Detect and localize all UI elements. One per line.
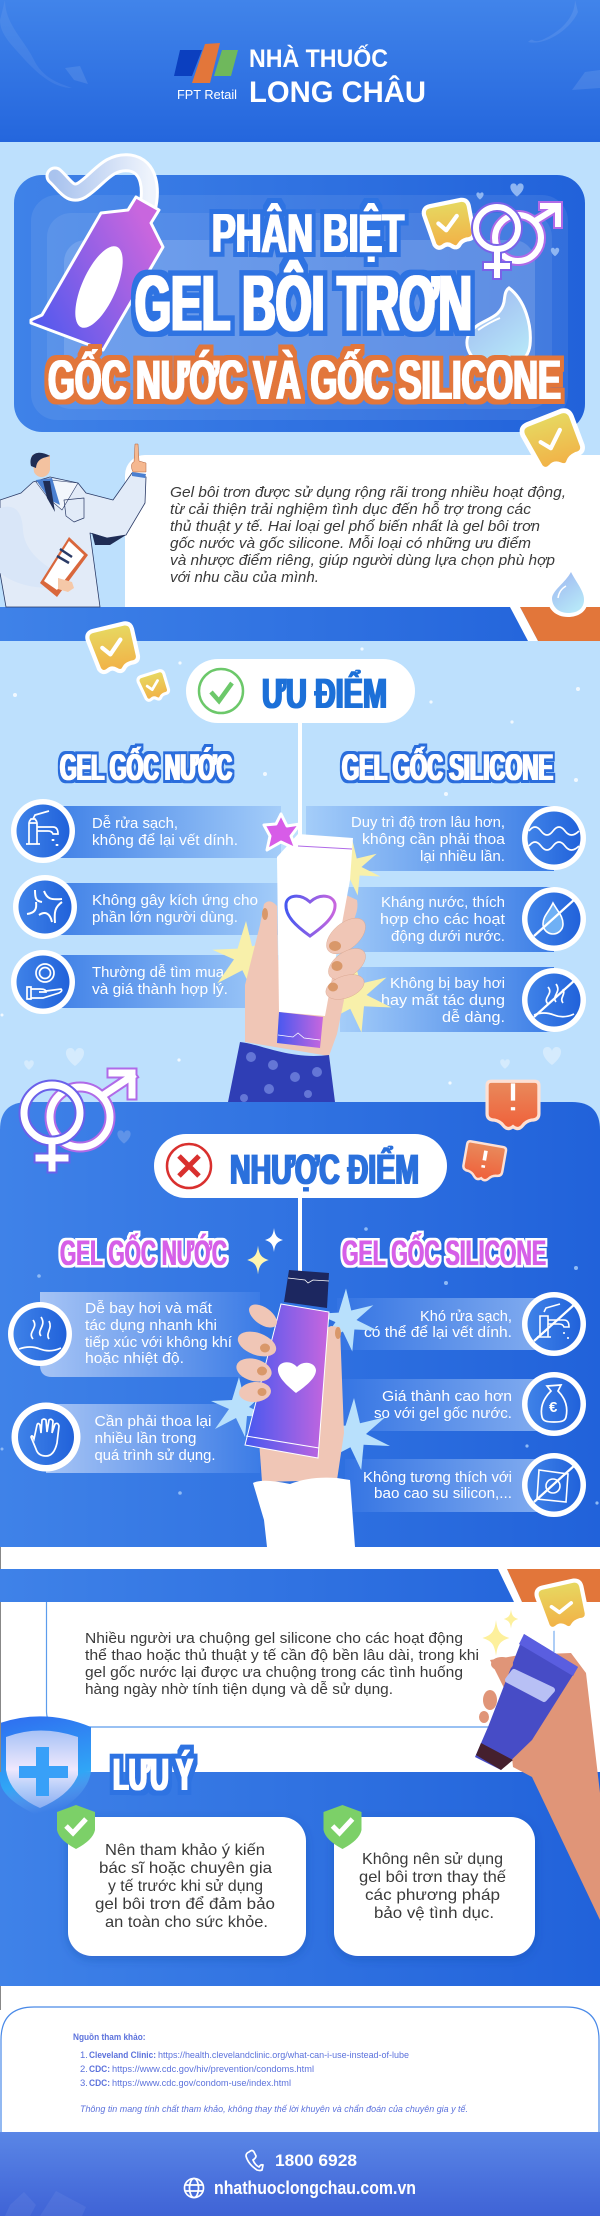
row: reapply <box>12 1402 260 1473</box>
panel: references: CDC: <box>89 2064 110 2075</box>
fingers <box>479 1657 513 1723</box>
text block: intro: với nhu cầu của mình. <box>170 569 319 586</box>
fingers <box>320 911 372 1004</box>
phone number: 1800 6928 <box>275 2151 357 2170</box>
icon: purple star <box>264 814 300 850</box>
row: expensive: Giá thành cao hơn <box>382 1388 512 1405</box>
row: incompatible <box>345 1453 586 1517</box>
row: easy to wash <box>11 799 281 863</box>
heart <box>278 1362 316 1393</box>
row: incompatible: bao cao su silicon,... <box>374 1485 512 1502</box>
panel: references: CDC: <box>89 2078 110 2089</box>
icon: irritation burst <box>27 890 62 923</box>
blue band above note <box>0 1569 600 1602</box>
text block: intro: thủ thuật y tế. Hai loại gel phổ biến nhất là gel bôi trơn <box>170 518 540 535</box>
row: affordable: Thường dễ tìm mua <box>92 964 225 981</box>
row: no evaporation: dễ dàng. <box>442 1009 505 1026</box>
fingernails <box>257 1327 341 1396</box>
heading: water-based: GEL GỐC NƯỚC <box>60 1233 227 1273</box>
icon: gender symbols <box>24 1073 132 1168</box>
text block: note: thể thao hoặc thủ thuật y tế cần độ bền lâu dài, trong khi <box>85 1647 479 1664</box>
row: long lasting: Duy trì độ trơn lâu hơn, <box>351 814 505 831</box>
row: water resistant: động dưới nước. <box>391 928 505 945</box>
card: consult a doctor: an toàn cho sức khỏe. <box>105 1914 268 1931</box>
sleeve <box>228 1042 335 1102</box>
decorative dots <box>0 647 580 1085</box>
row: evaporates: Dễ bay hơi và mất <box>85 1300 213 1317</box>
icon: money bag: € <box>549 1399 558 1416</box>
illustration: hand holding purple tube <box>211 1270 390 1547</box>
text block: intro: Gel bôi trơn được sử dụng rộng rãi trong nhiều hoạt động, <box>170 484 566 501</box>
icon: condom pack crossed <box>534 1465 575 1502</box>
reference 1: 1. <box>80 2050 88 2061</box>
starbursts <box>211 1288 390 1470</box>
panel: hero title <box>14 163 585 432</box>
row: long lasting <box>306 806 586 871</box>
fingernails <box>262 908 342 992</box>
brand name: NHÀ THUỐC <box>249 43 388 73</box>
hand <box>259 1326 344 1482</box>
footer <box>0 2132 600 2216</box>
band under intro <box>0 607 600 641</box>
icon: steam <box>19 1317 61 1351</box>
row: hard to wash: có thể để lại vết dính. <box>364 1324 512 1341</box>
row: evaporates <box>8 1292 260 1377</box>
card: not a replacement: bảo vệ tình dục. <box>374 1905 494 1922</box>
illustration: hand with blue tube <box>475 1580 600 1920</box>
row: incompatible: Không tương thích với <box>363 1469 512 1486</box>
brand name: LONG CHÂU <box>249 75 426 109</box>
brand name <box>249 43 426 109</box>
reference 3: 3. <box>80 2078 88 2089</box>
icon: green shield check <box>324 1805 362 1849</box>
white strip <box>0 1547 600 1569</box>
icon: steam crossed <box>534 980 575 1017</box>
row: water resistant: hợp cho các hoạt <box>380 911 506 928</box>
starbursts <box>212 838 392 1032</box>
text block: intro <box>170 484 566 586</box>
row: evaporates: tiếp xúc với không khí <box>85 1334 233 1351</box>
row: no irritation: Không gây kích ứng cho <box>92 892 258 909</box>
website: nhathuoclongchau.com.vn <box>214 2178 416 2198</box>
icon: yellow check badge <box>423 199 475 249</box>
card: consult a doctor: bác sĩ hoặc chuyên gia <box>99 1860 272 1877</box>
heart <box>117 1130 131 1144</box>
row: expensive: so với gel gốc nước. <box>374 1405 512 1422</box>
hearts <box>476 183 559 256</box>
row: easy to wash: không để lại vết dính. <box>92 832 238 849</box>
text block: intro: từ cải thiện trải nghiệm tình dục đến hỗ trợ trong các <box>170 501 532 518</box>
thin left edge line <box>0 1547 2 2010</box>
icon: doctor <box>0 444 146 607</box>
heading: notes: LƯU Ý <box>113 1749 193 1800</box>
row: no evaporation: Không bị bay hơi <box>390 975 505 992</box>
row: evaporates: hoặc nhiệt độ. <box>85 1350 184 1367</box>
row: no evaporation: hay mất tác dụng <box>381 992 505 1009</box>
title: PHÂN BIỆT <box>212 202 404 264</box>
heading: water-based: GEL GỐC NƯỚC <box>60 746 232 788</box>
row: reapply: nhiều lần trong <box>94 1430 196 1447</box>
icon: shield <box>0 1716 91 1818</box>
text block: note: hàng ngày nhờ tính tiện dụng và dễ sử dụng. <box>85 1681 393 1698</box>
tube cap <box>284 1270 329 1308</box>
icon: lubricant tube <box>31 197 163 350</box>
panel: references: https://www.cdc.gov/hiv/prevention/condoms.html <box>112 2064 314 2075</box>
card: consult a doctor <box>57 1805 306 1956</box>
panel: references: https://health.clevelandclinic.org/what-can-i-use-instead-of-lube <box>158 2050 409 2061</box>
panel: note <box>0 1602 600 1772</box>
row: no irritation: phần lớn người dùng. <box>92 909 238 926</box>
icon: drop crossed <box>534 899 575 936</box>
section: notes <box>0 1716 600 1986</box>
disclaimer: Thông tin mang tính chất tham khảo, không thay thế lời khuyên và chẩn đoán của chuyên gia y tế. <box>80 2104 468 2115</box>
icon: green shield check <box>57 1805 95 1849</box>
decorative dots <box>0 1227 599 1505</box>
row: hard to wash: Khó rửa sạch, <box>420 1308 512 1325</box>
header band <box>0 0 600 142</box>
logo: FPT Retail <box>174 43 238 102</box>
connector line <box>298 720 302 838</box>
row: hard to wash <box>337 1292 586 1356</box>
icon: coin in hand <box>27 964 62 999</box>
icon: alert badges <box>462 1081 539 1183</box>
logo: FPT Retail: FPT Retail <box>177 87 237 102</box>
illustration: hand holding white tube <box>212 814 392 1102</box>
section: advantages <box>0 622 586 1102</box>
connector line <box>298 1195 302 1271</box>
tube <box>277 834 353 1048</box>
panel: intro <box>125 455 600 607</box>
icon: faucet <box>26 811 58 846</box>
text block: note: Nhiều người ưa chuộng gel silicone cho các hoạt động <box>85 1630 463 1647</box>
text block: intro: và nhược điểm riêng, giúp người dùng lựa chọn phù hợp <box>170 552 555 569</box>
row: no irritation <box>13 875 281 939</box>
heading pill: disadvantages <box>154 1134 447 1198</box>
icon: sparkles <box>247 1228 283 1274</box>
icon: globe <box>184 2178 204 2198</box>
icon: gender symbols <box>476 206 558 275</box>
icon: gel squirt <box>55 163 149 210</box>
row: no evaporation <box>340 967 586 1032</box>
fingers <box>234 1300 281 1403</box>
row: long lasting: không cần phải thoa <box>362 831 506 848</box>
row: long lasting: lại nhiều lần. <box>420 848 505 865</box>
icon: faucet crossed <box>534 1304 575 1341</box>
icon: phone <box>246 2150 263 2170</box>
icon: waves <box>529 827 579 850</box>
heading pill: disadvantages: NHƯỢC ĐIỂM <box>230 1145 419 1194</box>
row: water resistant <box>330 887 586 952</box>
icon: yellow check badge <box>536 1580 588 1631</box>
card: consult a doctor: y tế trước khi sử dụng <box>108 1878 263 1895</box>
text block: note: gel gốc nước lại được ưa chuộng trong các tình huống <box>85 1664 463 1681</box>
text block: intro: gốc nước và gốc silicone. Mỗi loại có những ưu điểm <box>170 535 531 552</box>
row: water resistant: Kháng nước, thích <box>381 894 505 911</box>
card: not a replacement: các phương pháp <box>365 1887 500 1904</box>
icon: yellow check badges <box>86 622 170 702</box>
card: not a replacement: gel bôi trơn thay thế <box>359 1869 506 1886</box>
sleeve <box>253 1478 355 1547</box>
section: disadvantages <box>0 1073 600 1547</box>
panel: references: Nguồn tham khảo: <box>73 2032 146 2043</box>
row: evaporates: tác dụng nhanh khi <box>85 1317 217 1334</box>
tube <box>475 1634 578 1770</box>
card: not a replacement: Không nên sử dụng <box>362 1851 503 1868</box>
card: not a replacement <box>324 1805 535 1956</box>
icon: money bag <box>541 1385 567 1422</box>
panel: references <box>0 1986 600 2132</box>
icon: water drop <box>467 288 530 369</box>
reference 2: 2. <box>80 2064 88 2075</box>
row: affordable: và giá thành hợp lý. <box>92 981 228 998</box>
hearts <box>24 1047 561 1070</box>
card: consult a doctor: gel bôi trơn để đảm bảo <box>95 1895 275 1913</box>
icon: hand <box>31 1419 59 1456</box>
heading pill: advantages <box>186 659 415 723</box>
row: reapply: Cần phải thoa lại <box>94 1413 212 1430</box>
icon: drop on intro <box>548 568 588 617</box>
panel: references: https://www.cdc.gov/condom-use/index.html <box>112 2078 291 2089</box>
text block: note <box>85 1630 479 1698</box>
heading pill: advantages: ƯU ĐIỂM <box>262 669 387 718</box>
panel: references: Cleveland Clinic: <box>89 2050 156 2061</box>
hand <box>245 901 350 1056</box>
icon: sparkles <box>482 1609 518 1656</box>
row: expensive <box>337 1372 586 1436</box>
row: easy to wash: Dễ rửa sạch, <box>92 815 178 832</box>
tube body <box>245 1304 329 1458</box>
title <box>48 202 561 411</box>
row: reapply: quá trình sử dụng. <box>94 1447 216 1464</box>
row: affordable <box>11 950 281 1014</box>
icon: yellow check badge on hero edge <box>519 408 586 474</box>
card: consult a doctor: Nên tham khảo ý kiến <box>105 1842 265 1859</box>
